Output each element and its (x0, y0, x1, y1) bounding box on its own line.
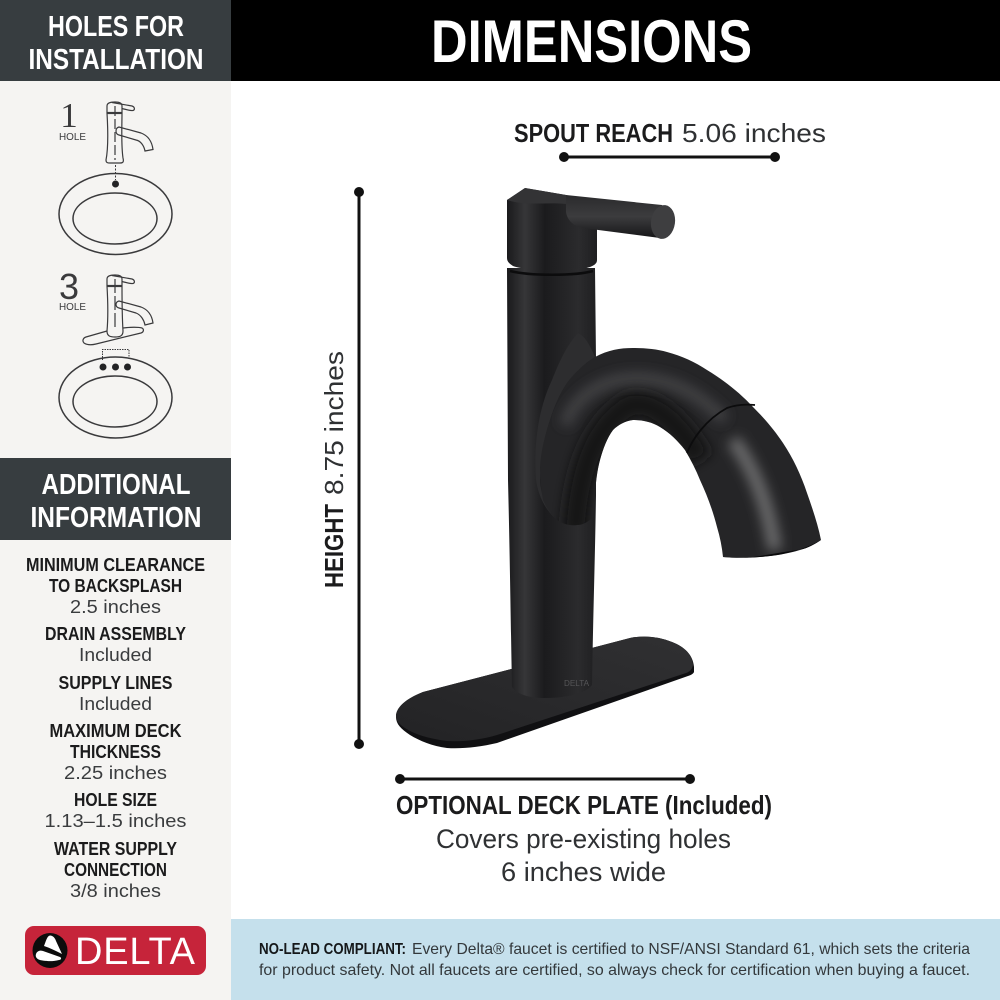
dimension: deck plate: OPTIONAL DECK PLATE (Included) (396, 790, 772, 820)
additional information list: 2.25 inches (64, 762, 167, 783)
additional information list: CONNECTION (64, 860, 167, 880)
additional information list (26, 555, 205, 901)
lever (566, 195, 677, 241)
additional information list: Included (79, 644, 152, 665)
faucet line drawing (106, 102, 153, 180)
label: 3 hole (59, 266, 86, 313)
additional information list: THICKNESS (70, 742, 161, 762)
additional information list: DRAIN ASSEMBLY (45, 624, 186, 644)
no-lead compliance note: Every Delta® faucet is certified to NSF/ANSI Standard 61, which sets the criteria (412, 941, 970, 958)
left sidebar background (0, 0, 231, 1000)
stem (507, 268, 596, 698)
Delta logo: DELTA (75, 931, 196, 973)
additional information list: TO BACKSPLASH (49, 576, 182, 596)
deck plate (396, 637, 694, 748)
additional information list: MAXIMUM DECK (50, 721, 182, 741)
heading: additional information: INFORMATION (30, 502, 202, 534)
label: 1 hole (59, 96, 86, 143)
Delta logo (25, 926, 206, 975)
additional information list: 2.5 inches (70, 596, 161, 617)
gusset between stem and spout (535, 333, 595, 520)
heading: dimensions: DIMENSIONS (431, 8, 752, 75)
spout (540, 348, 821, 562)
heading: additional information (0, 458, 231, 540)
label: 3 hole: HOLE (59, 301, 86, 313)
dimension: height: 8.75 inches (319, 351, 349, 495)
no-lead compliance note: for product safety. Not all faucets are certified, so always check for certification when buying a faucet. (259, 962, 970, 979)
heading: additional information: ADDITIONAL (42, 469, 190, 501)
icon: one hole installation (59, 96, 172, 254)
no-lead compliance note (231, 919, 1000, 1000)
heading: holes for installation (0, 0, 231, 81)
dimension: deck plate: Covers pre-existing holes (436, 824, 731, 854)
no-lead compliance note: NO-LEAD COMPLIANT: (259, 941, 406, 958)
handle collar (507, 188, 597, 275)
label: 1 hole: 1 (60, 96, 78, 135)
dimension: height (319, 187, 364, 749)
label: 1 hole: HOLE (59, 131, 86, 143)
sink with three holes (59, 350, 172, 438)
dimension: spout reach: 5.06 inches (682, 118, 826, 148)
dimension: spout reach (514, 118, 826, 162)
sink with one hole (59, 174, 172, 254)
faucet with deck plate line drawing (83, 275, 153, 345)
additional information list: WATER SUPPLY (54, 839, 177, 859)
heading: holes for installation: INSTALLATION (28, 44, 204, 76)
additional information list: Included (79, 693, 152, 714)
label: 3 hole: 3 (59, 266, 79, 307)
dimension: deck plate: 6 inches wide (501, 857, 666, 887)
additional information list: SUPPLY LINES (58, 673, 172, 693)
DELTA mark on stem: DELTA (564, 678, 589, 688)
additional information list: HOLE SIZE (74, 790, 157, 810)
additional information list: 3/8 inches (70, 880, 161, 901)
additional information list: MINIMUM CLEARANCE (26, 555, 205, 575)
dimension: deck plate (395, 774, 772, 887)
heading: dimensions (231, 0, 1000, 81)
faucet product image (396, 188, 821, 748)
dimension: height: HEIGHT (319, 504, 349, 588)
additional information list: 1.13–1.5 inches (44, 810, 186, 831)
dimension: spout reach: SPOUT REACH (514, 118, 673, 148)
icon: three hole installation (59, 266, 172, 438)
heading: holes for installation: HOLES FOR (48, 11, 184, 43)
